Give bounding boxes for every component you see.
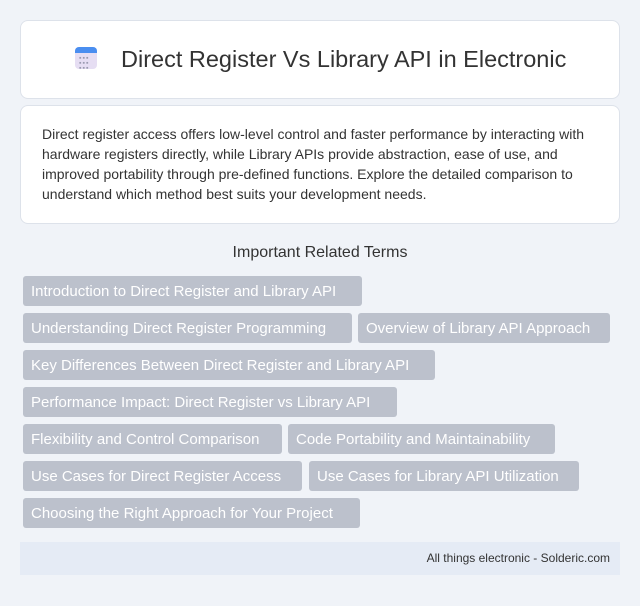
- icon: calendar: ▪▪▪: [79, 55, 89, 62]
- footer: All things electronic - Solderic.com: [427, 551, 610, 565]
- tags: Key Differences Between Direct Register and Library API: [31, 356, 409, 374]
- section heading: Important Related Terms: [233, 244, 407, 261]
- tags: Code Portability and Maintainability: [296, 430, 530, 448]
- tags: Use Cases for Direct Register Access: [31, 468, 281, 484]
- tags: Understanding Direct Register Programming: [31, 320, 326, 336]
- icon: calendar: [75, 47, 97, 69]
- tags: Flexibility and Control Comparison: [31, 430, 259, 448]
- tags: Overview of Library API Approach: [366, 320, 590, 336]
- description text: Direct register access offers low-level control and faster performance by interacting with hardware registers directly, while Library APIs provide abstraction, ease of use, and improved portability through pre-defined functions. Explore the detailed comparison to understand which method best suits your development needs.: [42, 126, 584, 202]
- tags: Introduction to Direct Register and Library API: [31, 282, 336, 300]
- icon: calendar: ▪▪▪: [79, 60, 89, 67]
- title: Direct Register Vs Library API in Electronic: [121, 46, 566, 72]
- tags: Performance Impact: Direct Register vs Library API: [31, 394, 370, 410]
- tags: Use Cases for Library API Utilization: [317, 468, 559, 484]
- description panel: [20, 105, 620, 224]
- footer: [20, 542, 620, 575]
- header panel: [20, 20, 620, 99]
- tags: Choosing the Right Approach for Your Project: [31, 504, 333, 522]
